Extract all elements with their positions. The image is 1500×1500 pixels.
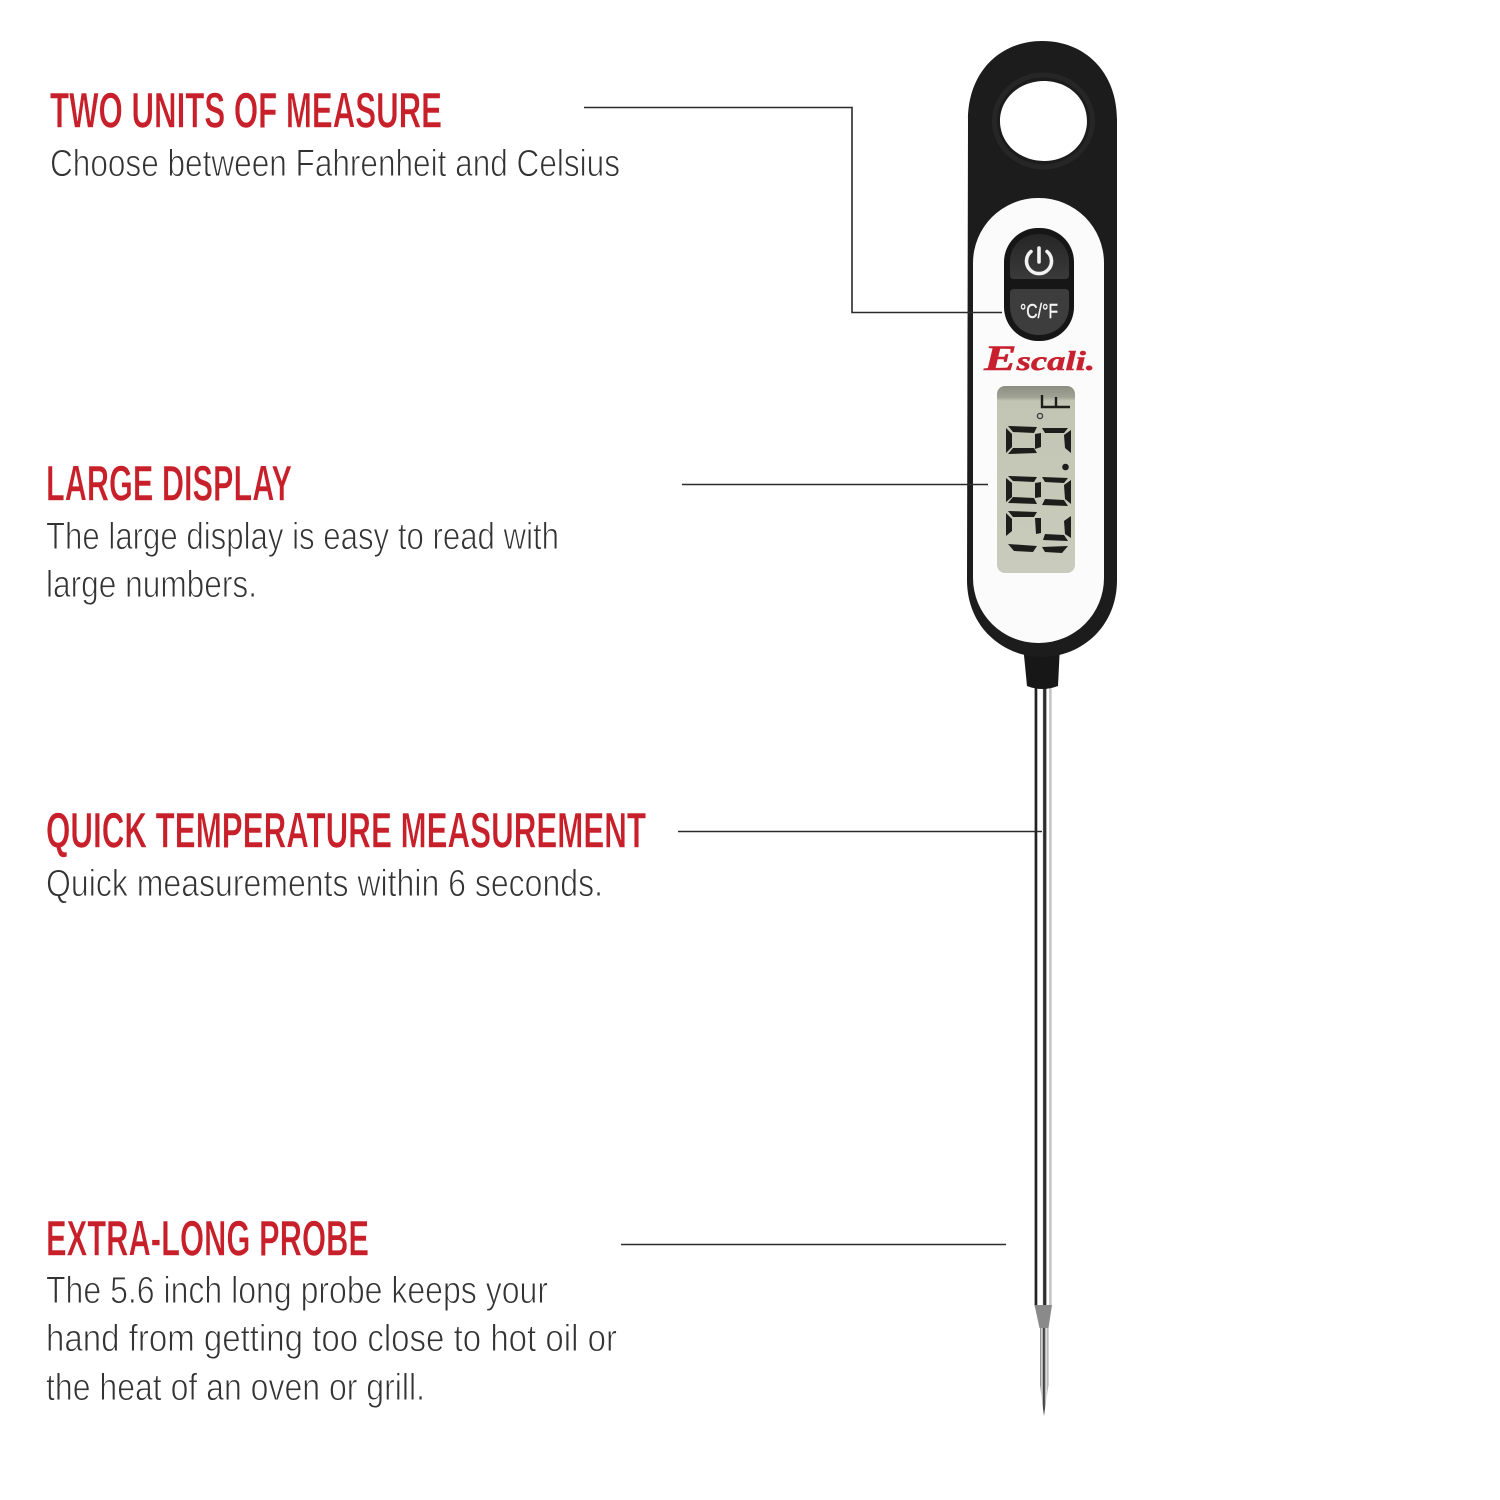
probe taper collar	[1034, 1305, 1052, 1328]
block: two units of measure	[50, 82, 620, 185]
white face panel	[973, 198, 1104, 643]
digit group middle	[1006, 476, 1071, 506]
text: choose between units: Choose between Fahrenheit and Celsius	[50, 143, 620, 185]
handle hole highlight	[994, 75, 1092, 167]
block: extra-long probe	[46, 1210, 617, 1409]
block: quick temperature measurement	[46, 802, 646, 905]
heading: extra-long probe: EXTRA-LONG PROBE	[46, 1210, 369, 1266]
heading: large display: LARGE DISPLAY	[46, 456, 292, 512]
LCD unit F	[1037, 395, 1070, 419]
digit group top	[1006, 426, 1071, 454]
LCD digits	[1006, 426, 1071, 553]
text: large display description: large numbers.	[46, 564, 257, 606]
handle body	[967, 41, 1117, 657]
brand logo: E scali.	[983, 338, 1095, 378]
probe tip	[1040, 1326, 1048, 1416]
text: large display description	[46, 516, 559, 606]
probe shaft	[1034, 686, 1052, 1306]
callout line: display	[682, 484, 988, 486]
thermometer	[967, 41, 1117, 1416]
unit button	[1010, 289, 1069, 335]
callout line: units button	[584, 108, 1002, 312]
decimal point	[1062, 464, 1069, 470]
icon: power	[1026, 248, 1051, 274]
handle neck	[1023, 645, 1060, 689]
text: probe description: hand from getting too close to hot oil or	[46, 1318, 617, 1360]
text: quick measurement description: Quick measurements within 6 seconds.	[46, 863, 603, 905]
power button	[1010, 234, 1069, 279]
heading: two units of measure: TWO UNITS OF MEASURE	[50, 82, 442, 138]
block: large display	[46, 456, 559, 606]
digit group bottom	[1006, 511, 1071, 553]
unit button: °C/°F	[1020, 301, 1058, 323]
LCD display	[997, 386, 1075, 573]
callout line: measurement	[678, 830, 1042, 832]
text: probe description: The 5.6 inch long probe keeps your	[46, 1270, 548, 1312]
heading: quick temperature measurement: QUICK TEMPERATURE MEASUREMENT	[46, 802, 646, 858]
text: probe description: the heat of an oven or grill.	[46, 1367, 425, 1409]
text: probe description	[46, 1270, 617, 1409]
button housing	[1004, 228, 1074, 341]
text: large display description: The large display is easy to read with	[46, 516, 559, 558]
callout line: probe	[621, 1244, 1006, 1246]
